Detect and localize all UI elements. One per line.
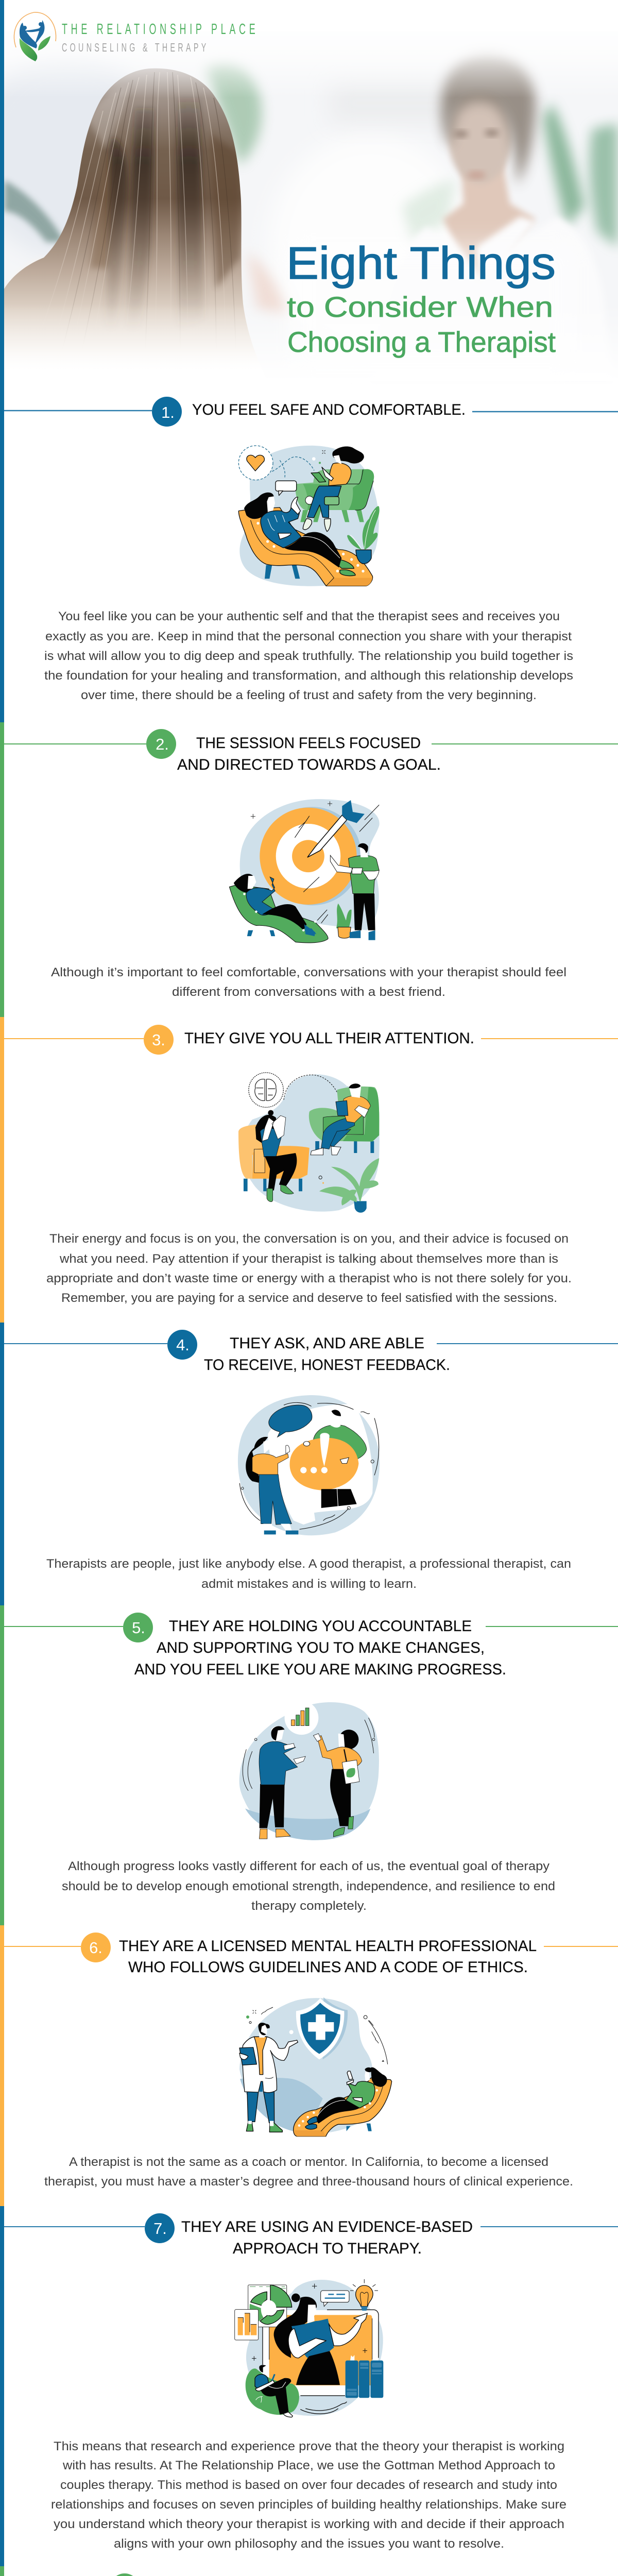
item 5 text: therapy completely. — [251, 1899, 367, 1913]
item 7 heading — [181, 2218, 473, 2257]
item 6 text: A therapist is not the same as a coach or mentor. In California, to become a licensed — [69, 2155, 548, 2169]
item 1 rule — [4, 411, 618, 412]
item 4 heading — [204, 1335, 450, 1374]
item 5 heading: THEY ARE HOLDING YOU ACCOUNTABLE — [169, 1618, 472, 1635]
item 6 heading: WHO FOLLOWS GUIDELINES AND A CODE OF ETHICS. — [128, 1959, 528, 1976]
item 7 text: This means that research and experience prove that the theory your therapist is working — [54, 2439, 564, 2453]
item 1 text: You feel like you can be your authentic self and that the therapist sees and receives you — [58, 609, 560, 623]
item 7 text: you understand which theory your therapist is working with and decide if their approach — [54, 2517, 564, 2531]
item 1 text: the foundation for your healing and transformation, and although this relationship develops — [44, 669, 573, 683]
illustration: two people with speech bubbles — [238, 1395, 380, 1535]
illustration: evidence presentation — [235, 2279, 383, 2417]
item 3 number — [144, 1025, 174, 1055]
title: to Consider When — [287, 291, 553, 323]
item 1 number: 1. — [161, 403, 175, 421]
illustration: progress conversation — [239, 1701, 379, 1840]
hair — [4, 68, 253, 349]
logo wordmark: THE RELATIONSHIP PLACE — [62, 21, 255, 38]
title: Eight Things — [286, 238, 556, 289]
item 5 number — [123, 1613, 153, 1642]
item 6 heading: THEY ARE A LICENSED MENTAL HEALTH PROFESSIONAL — [119, 1938, 537, 1955]
item 5 heading: AND YOU FEEL LIKE YOU ARE MAKING PROGRESS. — [134, 1661, 506, 1678]
illustration: doctor and shield — [239, 1997, 392, 2137]
item 4 text — [46, 1557, 571, 1591]
item 3 number: 3. — [152, 1031, 165, 1049]
illustration: therapist and client on chaise — [238, 446, 380, 586]
item 1 number — [152, 397, 182, 427]
panel: item 8 — [4, 2573, 618, 2576]
item 4 number: 4. — [176, 1336, 190, 1354]
item 5 number: 5. — [132, 1619, 145, 1637]
item 1 text: is what will allow you to dig deep and speak truthfully. The relationship you build together is — [44, 649, 573, 663]
item 4 rule — [4, 1343, 618, 1344]
panel: item 5 — [4, 1613, 618, 1913]
item 7 text: aligns with your own philosophy and the issues you want to resolve. — [114, 2537, 504, 2551]
item 1 text — [44, 609, 573, 702]
item 7 rule — [4, 2226, 618, 2227]
item 4 text: Therapists are people, just like anybody else. A good therapist, a professional therapist, can — [46, 1557, 571, 1571]
item 4 text: admit mistakes and is willing to learn. — [201, 1577, 417, 1591]
item 2 text: different from conversations with a best friend. — [172, 985, 445, 999]
item 7 heading: THEY ARE USING AN EVIDENCE-BASED — [181, 2218, 473, 2235]
item 3 text: appropriate and don’t waste time or energy with a therapist who is not there solely for you. — [46, 1272, 572, 1285]
item 3 rule — [4, 1038, 618, 1039]
title: Choosing a Therapist — [287, 326, 556, 358]
item 2 text — [51, 965, 566, 999]
item 6 text: therapist, you must have a master’s degree and three-thousand hours of clinical experience. — [44, 2175, 573, 2189]
panel: item 4 — [4, 1330, 618, 1591]
item 3 text: Remember, you are paying for a service and deserve to feel satisfied with the sessions. — [61, 1291, 557, 1305]
panel: item 2 — [4, 729, 618, 999]
item 5 text: should be to develop enough emotional strength, independence, and resilience to end — [62, 1879, 555, 1893]
hero photo — [4, 50, 618, 353]
item 7 heading: APPROACH TO THERAPY. — [233, 2240, 422, 2257]
item 6 rule — [4, 1946, 618, 1947]
item 7 text — [51, 2439, 566, 2551]
item 5 text — [62, 1859, 555, 1913]
item 5 rule — [4, 1626, 618, 1627]
item 3 heading: THEY GIVE YOU ALL THEIR ATTENTION. — [184, 1030, 474, 1047]
side colour bar — [0, 0, 4, 2576]
item 4 number — [167, 1330, 197, 1360]
item 1 heading: YOU FEEL SAFE AND COMFORTABLE. — [192, 401, 466, 418]
item 6 text — [44, 2155, 573, 2189]
item 7 text: couples therapy. This method is based on over four decades of research and study into — [60, 2478, 557, 2492]
item 2 number — [146, 729, 176, 759]
item 7 number: 7. — [153, 2219, 167, 2238]
item 5 heading — [134, 1618, 506, 1678]
item 2 text: Although it’s important to feel comfortable, conversations with your therapist should feel — [51, 965, 566, 979]
panel: item 1 — [4, 397, 618, 702]
item 5 heading: AND SUPPORTING YOU TO MAKE CHANGES, — [157, 1639, 485, 1656]
item 6 number — [81, 1933, 111, 1962]
logo — [14, 12, 255, 61]
illustration: therapy session with armchairs — [238, 1073, 380, 1213]
logo tagline: COUNSELING & THERAPY — [62, 42, 206, 55]
item 8 number — [110, 2573, 140, 2576]
item 3 text: Their energy and focus is on you, the conversation is on you, and their advice is focused on — [49, 1232, 569, 1246]
item 6 heading — [119, 1938, 537, 1976]
item 6 number: 6. — [89, 1939, 102, 1957]
item 4 heading: TO RECEIVE, HONEST FEEDBACK. — [204, 1357, 450, 1374]
icon: logo emblem — [14, 12, 56, 61]
panel: item 6 — [4, 1933, 618, 2189]
item 2 rule — [4, 743, 618, 744]
item 7 number — [145, 2213, 175, 2243]
item 1 text: over time, there should be a feeling of trust and safety from the very beginning. — [81, 688, 537, 702]
item 5 text: Although progress looks vastly different for each of us, the eventual goal of therapy — [68, 1859, 550, 1873]
item 3 text: what you need. Pay attention if your therapist is talking about themselves more than is — [59, 1252, 558, 1266]
item 2 heading: THE SESSION FEELS FOCUSED — [196, 735, 421, 752]
item 7 text: with has results. At The Relationship Place, we use the Gottman Method Approach to — [62, 2459, 555, 2472]
item 1 text: exactly as you are. Keep in mind that the personal connection you share with your therapist — [45, 630, 572, 643]
item 3 text — [46, 1232, 572, 1305]
panel: item 3 — [4, 1025, 618, 1305]
title — [286, 238, 556, 358]
item 2 heading: AND DIRECTED TOWARDS A GOAL. — [177, 756, 441, 773]
item 2 heading — [177, 735, 441, 773]
item 2 number: 2. — [156, 735, 169, 753]
item 7 text: relationships and focuses on seven principles of building healthy relationships. Make sure — [51, 2498, 566, 2512]
illustration: target and dart — [229, 799, 380, 943]
panel: item 7 — [4, 2213, 618, 2551]
item 4 heading: THEY ASK, AND ARE ABLE — [230, 1335, 424, 1352]
